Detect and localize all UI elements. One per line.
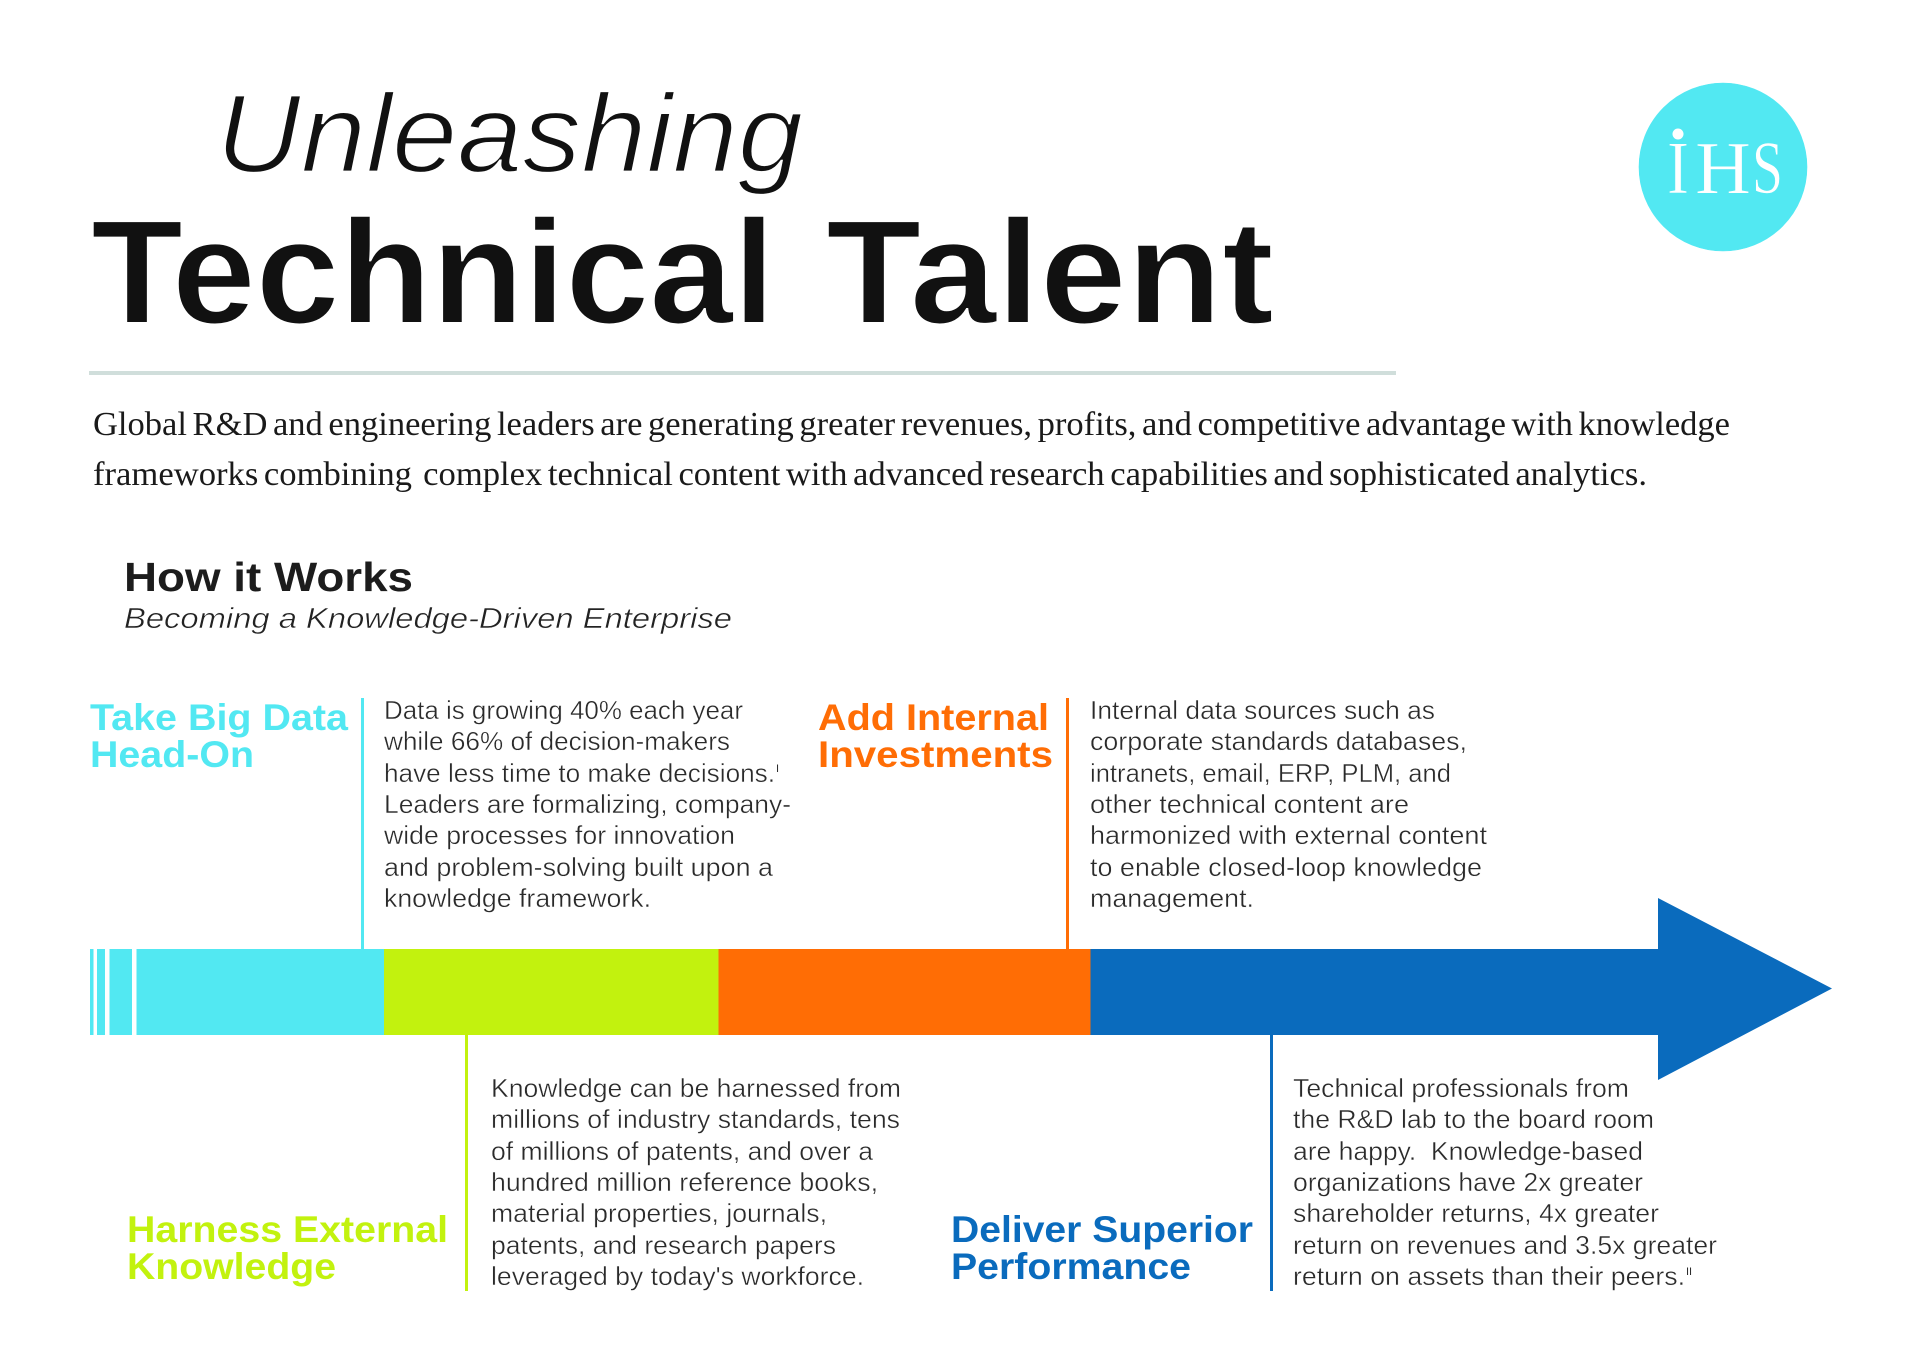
icon: IHS logo: S bbox=[1752, 127, 1783, 210]
step 2: Harness External Knowledge bbox=[127, 1035, 901, 1291]
step 2: Harness External Knowledge: Harness External bbox=[127, 1209, 448, 1250]
step 4: Deliver Superior Performance: are happy. Knowledge-based bbox=[1293, 1136, 1643, 1166]
step 1: Take Big Data Head-On: while 66% of decision-makers bbox=[383, 726, 730, 756]
step 4: Deliver Superior Performance: Performance bbox=[951, 1246, 1191, 1287]
section heading: How it Works: How it Works bbox=[124, 554, 413, 600]
step 2: Harness External Knowledge: of millions of patents, and over a bbox=[491, 1136, 874, 1166]
title: Technical bbox=[91, 190, 775, 355]
section heading: How it Works: Becoming a Knowledge-Driven Enterprise bbox=[124, 603, 732, 635]
step 1: Take Big Data Head-On: Data is growing 40% each year bbox=[384, 695, 743, 725]
step 3: Add Internal Investments: Investments bbox=[818, 734, 1053, 775]
step 4: Deliver Superior Performance: shareholder returns, 4x greater bbox=[1293, 1198, 1659, 1228]
icon: IHS logo bbox=[1639, 83, 1807, 251]
step 2: Harness External Knowledge: leveraged by today's workforce. bbox=[491, 1261, 864, 1291]
step 2: Harness External Knowledge: millions of industry standards, tens bbox=[491, 1104, 900, 1134]
step 1: Take Big Data Head-On: wide processes for innovation bbox=[383, 820, 735, 850]
title: Talent bbox=[826, 190, 1274, 355]
title: Unleashing bbox=[216, 72, 803, 196]
step 2: Harness External Knowledge: Knowledge bbox=[127, 1246, 336, 1287]
step 3: Add Internal Investments bbox=[818, 695, 1488, 949]
step 4: Deliver Superior Performance: the R&D lab to the board room bbox=[1293, 1104, 1654, 1134]
step 3: Add Internal Investments: intranets, email, ERP, PLM, and bbox=[1090, 758, 1451, 788]
step 4: Deliver Superior Performance: organizations have 2x greater bbox=[1293, 1167, 1643, 1197]
step 2: Harness External Knowledge: Knowledge can be harnessed from bbox=[491, 1073, 901, 1103]
section heading: How it Works bbox=[124, 554, 732, 635]
step 4: Deliver Superior Performance: return on assets than their peers. bbox=[1293, 1261, 1685, 1291]
step 4: Deliver Superior Performance: Technical professionals from bbox=[1293, 1073, 1629, 1103]
intro paragraph: Global R&D and engineering leaders are generating greater revenues, profits, and competitive advantage with knowledge bbox=[93, 406, 1730, 443]
step 2: Harness External Knowledge: patents, and research papers bbox=[491, 1230, 836, 1260]
step 1: Take Big Data Head-On: Leaders are formalizing, company- bbox=[384, 789, 791, 819]
step 4: Deliver Superior Performance: return on revenues and 3.5x greater bbox=[1293, 1230, 1717, 1260]
title bbox=[91, 72, 1274, 355]
step 3: Add Internal Investments: Add Internal bbox=[818, 697, 1049, 738]
icon: IHS logo: H bbox=[1695, 127, 1751, 210]
arrow timeline bbox=[90, 898, 1832, 1080]
step 4: Deliver Superior Performance bbox=[951, 1035, 1717, 1291]
step 3: Add Internal Investments: corporate standards databases, bbox=[1090, 726, 1467, 756]
step 3: Add Internal Investments: other technical content are bbox=[1090, 789, 1409, 819]
step 3: Add Internal Investments: management. bbox=[1090, 883, 1254, 913]
step 4: Deliver Superior Performance: II bbox=[1686, 1266, 1692, 1278]
step 1: Take Big Data Head-On: and problem-solving built upon a bbox=[384, 852, 774, 882]
step 1: Take Big Data Head-On: knowledge framework. bbox=[384, 883, 651, 913]
intro paragraph bbox=[93, 406, 1730, 493]
step 2: Harness External Knowledge: hundred million reference books, bbox=[491, 1167, 878, 1197]
step 1: Take Big Data Head-On bbox=[90, 695, 791, 949]
step 3: Add Internal Investments: to enable closed-loop knowledge bbox=[1090, 852, 1482, 882]
step 1: Take Big Data Head-On: have less time to make decisions. bbox=[384, 758, 775, 788]
step 3: Add Internal Investments: Internal data sources such as bbox=[1090, 695, 1435, 725]
step 4: Deliver Superior Performance: Deliver Superior bbox=[951, 1209, 1253, 1250]
icon: IHS logo: I bbox=[1667, 127, 1689, 210]
step 1: Take Big Data Head-On: Head-On bbox=[90, 734, 254, 775]
step 1: Take Big Data Head-On: Take Big Data bbox=[90, 697, 348, 738]
step 3: Add Internal Investments: harmonized with external content bbox=[1090, 820, 1488, 850]
step 2: Harness External Knowledge: material properties, journals, bbox=[491, 1198, 827, 1228]
intro paragraph: frameworks combining complex technical content with advanced research capabilities and sophisticated analytics. bbox=[93, 456, 1647, 493]
step 1: Take Big Data Head-On: I bbox=[776, 763, 779, 775]
